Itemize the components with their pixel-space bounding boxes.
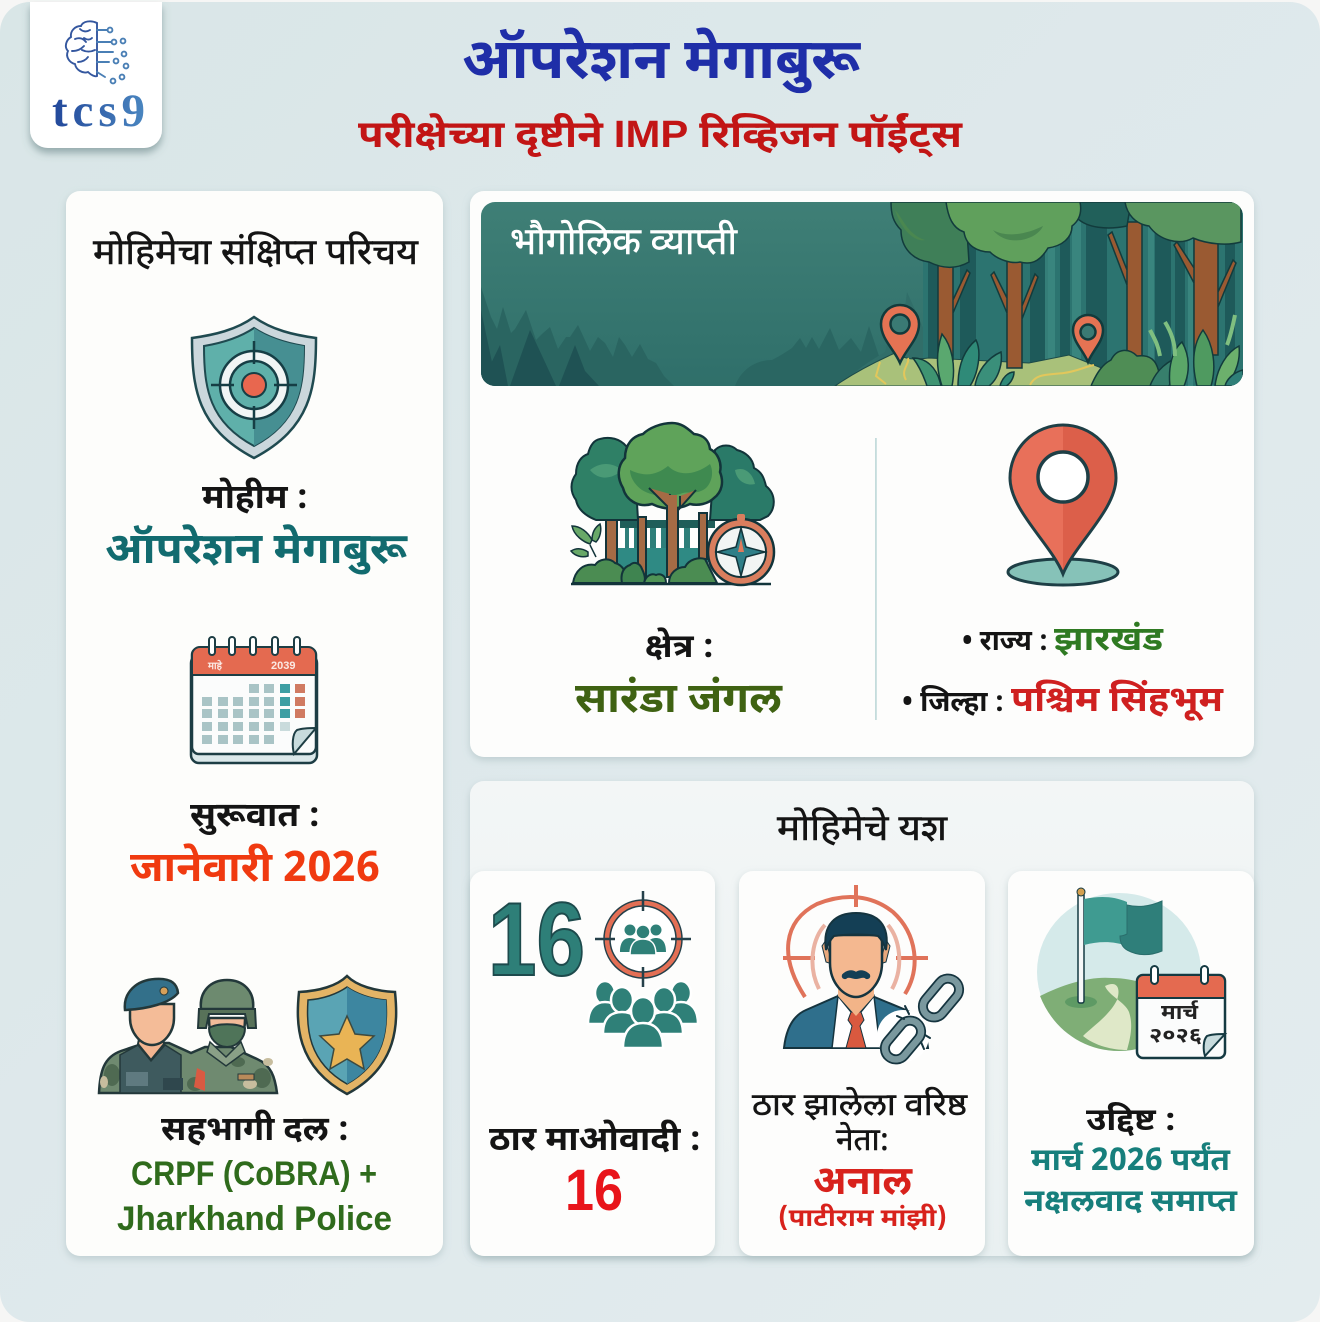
icon: calendar: 2039	[271, 660, 295, 672]
icon: calendar	[191, 637, 317, 763]
foreground plants	[913, 330, 1243, 386]
icon: flag, hill and calendar	[1037, 888, 1225, 1058]
label: senior leader killed: ठार झालेला वरिष्ठ	[752, 1087, 968, 1128]
value: CRPF: CRPF (CoBRA) +	[131, 1155, 377, 1193]
value: Anal: अनाल	[813, 1159, 913, 1211]
value: mission name: ऑपरेशन मेगाबुरू	[105, 524, 408, 581]
subtitle: परीक्षेच्या दृष्टीने IMP रिव्हिजन पॉईंट्स	[358, 112, 963, 163]
logo card: tcs9	[52, 85, 145, 137]
value: Jharkhand Police: Jharkhand Police	[117, 1200, 392, 1238]
panel heading: mission introduction: मोहिमेचा संक्षिप्त परिचय	[93, 231, 419, 279]
icon: forest with compass	[571, 423, 774, 585]
calendar text: 2026: २०२६	[1149, 1023, 1202, 1051]
left tree canopy	[572, 438, 774, 520]
panel: geographic extent	[470, 191, 1254, 757]
value: 16: 16	[565, 1158, 623, 1223]
icon: police badge	[298, 976, 396, 1094]
icon: soldiers	[99, 979, 277, 1093]
title: ऑपरेशन मेगाबुरू	[462, 27, 861, 101]
icon: targeted leader and broken chain	[783, 885, 964, 1064]
label: participating forces: सहभागी दल :	[161, 1110, 349, 1154]
value: West Singhbhum: पश्चिम सिंहभूम	[1011, 679, 1224, 726]
forest backdrop	[923, 202, 1243, 386]
value: by March 2026: मार्च 2026 पर्यंत	[1031, 1142, 1231, 1183]
icon: map pin one	[881, 305, 919, 363]
label: state: • राज्य :	[962, 624, 1048, 662]
calendar text: March: मार्च	[1161, 1000, 1199, 1028]
label: area: क्षेत्र :	[645, 626, 714, 671]
value: end of Naxalism: नक्षलवाद समाप्त	[1024, 1183, 1238, 1224]
panel heading: achievements: मोहिमेचे यश	[777, 807, 948, 855]
icon: shield with target	[192, 317, 316, 458]
card: Maoists killed	[470, 871, 715, 1256]
panel: mission introduction	[66, 191, 443, 1256]
icon: map pin two	[1073, 315, 1103, 362]
leaves	[571, 524, 601, 557]
label: start: सुरूवात :	[190, 796, 320, 840]
bushes	[573, 558, 717, 583]
icon: number 16 with target and people	[488, 882, 698, 1048]
value: Saranda forest: सारंडा जंगल	[575, 675, 783, 730]
icon: large location pin	[1008, 425, 1118, 585]
banner: forest illustration	[480, 202, 1243, 403]
panel: mission achievements	[470, 781, 1254, 1256]
icon: calendar: माहे	[207, 659, 223, 672]
logo card	[30, 2, 162, 148]
label: objective: उद्दिष्ट :	[1086, 1102, 1176, 1143]
banner heading: भौगोलिक व्याप्ती	[510, 219, 738, 270]
value: start date: जानेवारी 2026	[130, 843, 380, 899]
label: district: • जिल्हा :	[902, 685, 1004, 723]
card: objective	[1008, 871, 1254, 1256]
icon: number 16 with target and people: 16	[488, 882, 585, 998]
value: Patiram Manjhi: (पाटीराम मांझी)	[778, 1203, 947, 1237]
label: mission: मोहीम :	[202, 478, 308, 522]
label: leader: नेता:	[836, 1122, 889, 1163]
centre tree	[667, 477, 678, 577]
card: senior leader killed	[739, 871, 985, 1256]
label: Maoists killed: ठार माओवादी :	[489, 1120, 701, 1164]
value: Jharkhand: झारखंड	[1054, 620, 1164, 664]
